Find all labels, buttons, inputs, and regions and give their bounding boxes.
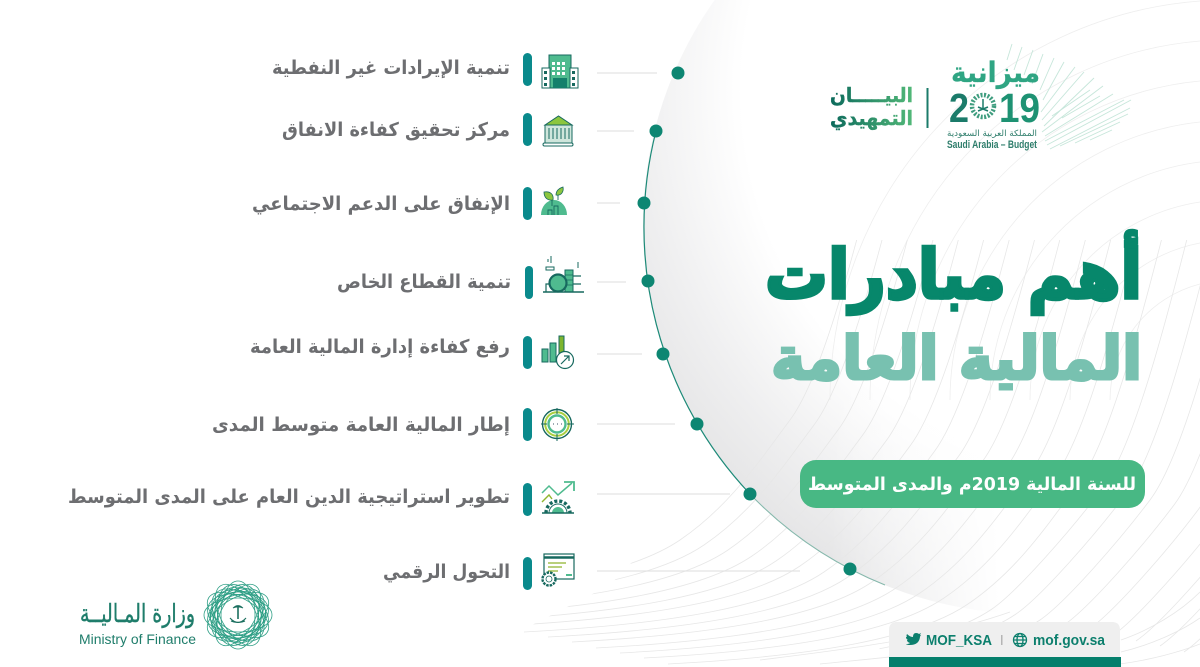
preliminary statement title: التمهيدي [830, 106, 913, 131]
item 3 label: الإنفاق على الدعم الاجتماعي [252, 193, 510, 215]
item 7 label: تطوير استراتيجية الدين العام على المدى المتوسط [68, 486, 510, 508]
separator [1001, 635, 1002, 645]
icon: target [541, 408, 574, 441]
item 8 label: التحول الرقمي [383, 561, 510, 583]
item 8 marker [523, 557, 532, 590]
item 1 label: تنمية الإيرادات غير النفطية [272, 57, 510, 79]
item 5 marker [523, 336, 532, 369]
budget 2019 logo [947, 44, 1131, 151]
icon: office building [542, 55, 578, 88]
icon: browser with gear [542, 554, 574, 586]
main arc: lower faded part [750, 494, 885, 585]
ministry of finance wordmark [79, 599, 196, 647]
item 4 label: تنمية القطاع الخاص [337, 271, 511, 293]
item 7 marker [523, 483, 532, 516]
icon: gear with rising arrows [542, 482, 574, 513]
item 2 label: مركز تحقيق كفاءة الانفاق [282, 119, 510, 141]
item 5 label: رفع كفاءة إدارة المالية العامة [250, 336, 510, 358]
main arc [644, 131, 750, 494]
icon: bird [906, 633, 921, 645]
item 3 marker [523, 187, 532, 220]
footer contact bar [889, 622, 1121, 667]
item 4 marker [525, 266, 533, 299]
icon: bar chart with arrow [542, 336, 574, 368]
logo emblem [972, 95, 994, 117]
logo digits 19: 19 [999, 85, 1040, 131]
subtitle pill: للسنة المالية 2019م والمدى المتوسط [808, 474, 1136, 495]
map line pattern [1007, 44, 1131, 149]
item 6 marker [523, 408, 532, 441]
logo word: mizaniya: ميزانية [951, 56, 1040, 89]
preliminary statement title [830, 83, 913, 131]
twitter handle: MOF_KSA [926, 632, 992, 649]
background: sweeping wave lines [524, 240, 1200, 664]
logo digit 2: 2 [949, 85, 969, 131]
item 2 marker [523, 113, 532, 146]
timeline leader lines and dots [597, 66, 856, 576]
icon: globe [1014, 634, 1026, 646]
icon: laptop bank [543, 116, 573, 146]
ministry of finance wordmark: Ministry of Finance [79, 632, 196, 647]
subtitle pill [800, 460, 1145, 508]
logo kingdom text: المملكة العربية السعودية [947, 129, 1037, 139]
icon: coins and factory [543, 256, 584, 292]
item 6 label: إطار المالية العامة متوسط المدى [212, 414, 510, 436]
heading line 1: أهم مبادرات [765, 230, 1142, 315]
item 1 marker [523, 53, 532, 86]
heading line 2: المالية العامة [771, 324, 1142, 394]
background: shading fade to the right [642, 0, 1200, 615]
ministry emblem [200, 577, 276, 653]
icon: plant on hill [541, 187, 567, 215]
background: concentric arcs [830, 1, 1200, 400]
logo divider [926, 88, 928, 128]
ministry of finance wordmark: وزارة المـاليــة [80, 599, 195, 629]
preliminary statement title: البيـــــان [830, 83, 913, 107]
logo english text: Saudi Arabia – Budget [947, 139, 1037, 151]
website: mof.gov.sa [1033, 632, 1106, 649]
background: shaded circle [643, 0, 1200, 614]
